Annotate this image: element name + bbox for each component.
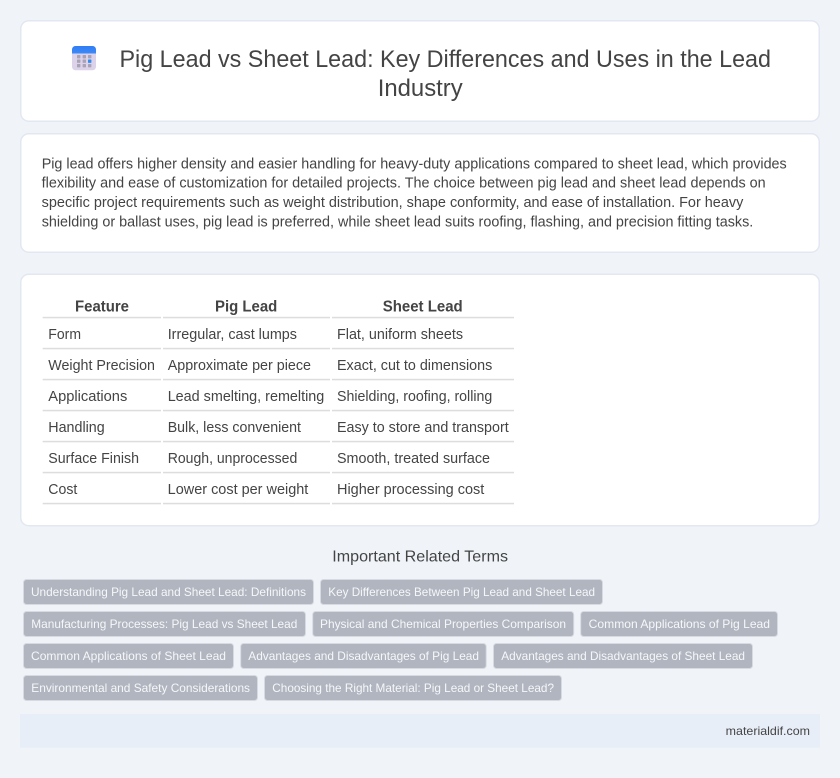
table row: Handling: Handling [48,420,105,436]
tag: choosing material: Choosing the Right Material: Pig Lead or Sheet Lead? [272,681,554,695]
tag: pros and cons of sheet lead: Advantages and Disadvantages of Sheet Lead [501,649,745,663]
table row: Cost: Lower cost per weight [168,482,308,498]
table row: Form [43,327,514,349]
panel: header [21,21,819,121]
table row: Weight Precision [43,358,514,380]
table row: Form: Irregular, cast lumps [168,327,297,343]
summary paragraph: shielding or ballast uses, pig lead is preferred, while sheet lead suits roofing, flashing, and precision fitting tasks. [42,214,753,230]
summary paragraph: specific project requirements such as weight distribution, shape conformity, and ease of installation. For heavy [42,195,744,211]
table row: Handling: Easy to store and transport [337,420,509,436]
title: Industry [378,75,463,102]
table row: Weight Precision: Weight Precision [48,358,155,374]
table row: Applications [43,389,514,411]
tag: applications of pig lead [581,612,778,636]
table header row: Feature [75,299,129,316]
tag: definitions: Understanding Pig Lead and Sheet Lead: Definitions [31,585,306,599]
tag: manufacturing: Manufacturing Processes: Pig Lead vs Sheet Lead [31,617,297,631]
tag: choosing material [264,676,562,700]
tag: pros and cons of pig lead [241,644,486,668]
tag: applications of pig lead: Common Applications of Pig Lead [589,617,770,631]
panel: summary [21,134,819,252]
table row: Form: Flat, uniform sheets [337,327,463,343]
table row: Cost: Higher processing cost [337,482,484,498]
summary paragraph: flexibility and ease of customization for detailed projects. The choice between pig lead and sheet lead depends on [42,176,766,192]
table row: Surface Finish: Surface Finish [48,451,139,467]
table row: Applications: Lead smelting, remelting [168,389,324,405]
table header row: Sheet Lead [383,299,463,316]
tag: manufacturing [24,612,306,636]
tag: properties: Physical and Chemical Properties Comparison [320,617,566,631]
panel: comparison table [21,274,819,526]
tag: environment and safety: Environmental and Safety Considerations [31,681,250,695]
title [120,46,771,102]
table row: Applications: Applications [48,389,127,405]
table row: Surface Finish: Rough, unprocessed [168,451,297,467]
summary paragraph [42,156,787,230]
table row: Cost: Cost [48,482,77,498]
icon: calendar [72,46,96,70]
heading: Important Related Terms: Important Related Terms [332,549,508,566]
table row: Applications: Shielding, roofing, rolling [337,389,492,405]
table row: Surface Finish: Smooth, treated surface [337,451,490,467]
table row: Surface Finish [43,451,514,473]
tag: environment and safety [24,676,258,700]
tag: applications of sheet lead [24,644,234,668]
table row: Handling [43,420,514,442]
table header row [43,299,514,318]
tag: pros and cons of sheet lead [494,644,752,668]
tag: applications of sheet lead: Common Applications of Sheet Lead [31,649,226,663]
table row: Cost [43,482,514,504]
footer source text: materialdif.com [726,724,810,738]
table row: Weight Precision: Exact, cut to dimensions [337,358,492,374]
tag: pros and cons of pig lead: Advantages and Disadvantages of Pig Lead [248,649,479,663]
tag: key differences: Key Differences Between Pig Lead and Sheet Lead [328,585,595,599]
summary paragraph: Pig lead offers higher density and easier handling for heavy-duty applications compared to sheet lead, which provides [42,156,787,172]
title: Pig Lead vs Sheet Lead: Key Differences and Uses in the Lead [120,46,771,73]
tag: properties [313,612,574,636]
table row: Handling: Bulk, less convenient [168,420,301,436]
footer [20,714,820,748]
related term tags [24,580,778,700]
tag: definitions [24,580,314,604]
table row: Form: Form [48,327,81,343]
table row: Weight Precision: Approximate per piece [168,358,311,374]
tag: key differences [320,580,602,604]
table header row: Pig Lead [215,299,277,316]
